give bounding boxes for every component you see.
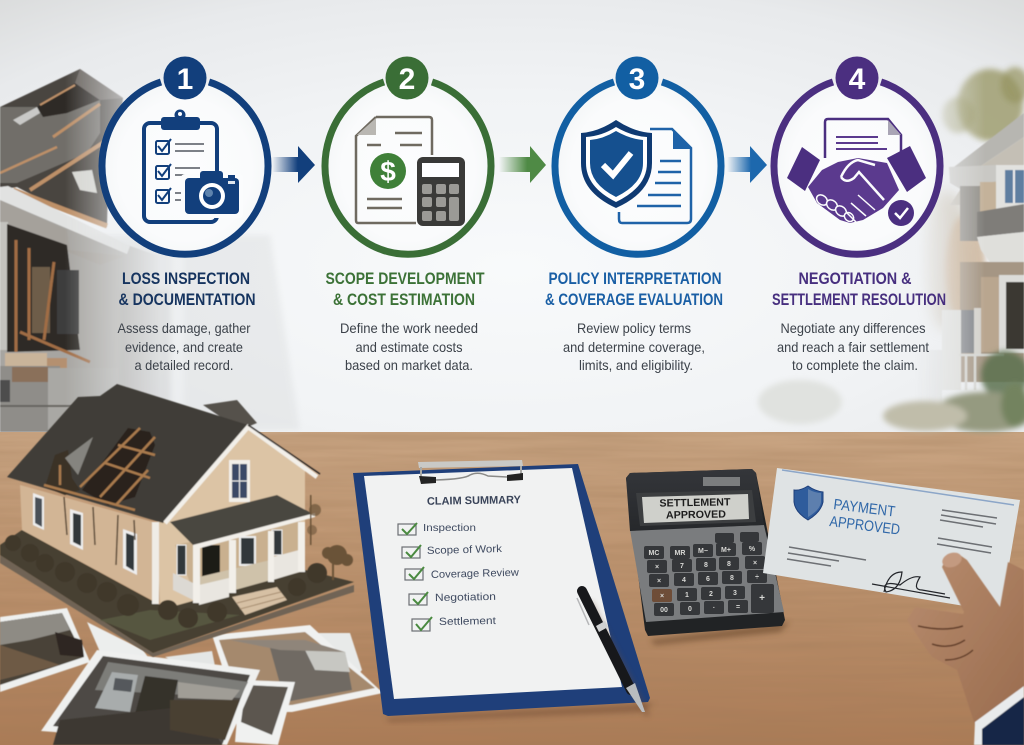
- checklist: Inspection: [423, 522, 476, 534]
- keypad: 00: [660, 607, 668, 614]
- shield: [794, 486, 823, 520]
- description 4: to complete the claim.: [792, 357, 918, 373]
- ring and badge 2: 2: [399, 63, 415, 96]
- tree foliage: [919, 67, 1024, 330]
- payment text: [829, 496, 901, 539]
- arrow 3 to 4: [727, 146, 767, 183]
- keypad: 1: [685, 592, 689, 599]
- checklist: Coverage Review: [431, 567, 519, 581]
- keypad: ×: [660, 593, 664, 600]
- photo: small interior: [235, 680, 295, 745]
- heading 3: POLICY INTERPRETATION: [548, 269, 722, 288]
- faint ghost of house behind step 1: [60, 235, 300, 430]
- arrow 2 to 3: [499, 146, 546, 183]
- keypad: ·: [713, 605, 715, 612]
- damage photographs: [0, 608, 383, 745]
- cuff and sleeve: [974, 686, 1024, 745]
- checklist: Settlement: [439, 615, 496, 628]
- garden shrubs, right: [758, 351, 1024, 432]
- ring and badge 1: 1: [177, 63, 193, 96]
- ring and badge 3: [555, 56, 721, 258]
- checklist: [398, 522, 519, 631]
- step 1: [102, 56, 268, 373]
- keypad: ÷: [755, 574, 759, 581]
- body: [626, 469, 785, 636]
- main roof: [7, 384, 248, 523]
- keypad: +: [759, 593, 765, 604]
- description 4: and reach a fair settlement: [777, 339, 929, 355]
- keypad: 3: [733, 590, 737, 597]
- checklist: Negotiation: [435, 591, 496, 604]
- keypad: 8: [727, 561, 731, 568]
- heading 1: & DOCUMENTATION: [118, 290, 256, 309]
- shrubs: [5, 535, 327, 628]
- side wall: [20, 485, 157, 603]
- board: [353, 464, 650, 716]
- description 1: a detailed record.: [134, 357, 234, 373]
- model house with damaged roof: [0, 384, 354, 657]
- icon: shield and policy document: [581, 120, 692, 223]
- ring and badge 2: [325, 56, 491, 258]
- description 3: [563, 320, 705, 373]
- paper: [763, 468, 1020, 612]
- tree and house photo, right: [925, 64, 1024, 399]
- hand holding check: [907, 550, 1024, 745]
- description 2: Define the work needed: [340, 320, 478, 336]
- step 3: [545, 56, 723, 373]
- clipboard: claim summary: [353, 460, 655, 722]
- corner trim: [152, 522, 159, 604]
- payment text: PAYMENT: [833, 496, 896, 521]
- calculator: [626, 469, 790, 645]
- description 3: Review policy terms: [577, 320, 691, 336]
- photo: interior damage right: [212, 625, 383, 712]
- keypad: [644, 532, 774, 616]
- heading 3: & COVERAGE EVALUATION: [545, 290, 723, 309]
- metal clip: [418, 460, 523, 484]
- misty sky background: [0, 0, 1024, 432]
- icon: estimate document and calculator: [356, 117, 465, 226]
- heading 4: [772, 269, 946, 309]
- display: SETTLEMENT: [659, 496, 731, 510]
- front wall: [157, 425, 305, 610]
- hand: [907, 553, 1024, 725]
- icon: estimate document and calculator: $: [380, 156, 396, 187]
- title: CLAIM SUMMARY: [427, 494, 522, 508]
- small tree: [307, 495, 353, 580]
- keypad: 6: [706, 576, 710, 583]
- icon: handshake and agreement: [787, 119, 926, 226]
- description 1: [118, 320, 251, 373]
- keypad: M−: [698, 548, 708, 555]
- display: [636, 490, 756, 526]
- gable window: [229, 460, 250, 502]
- keypad: 4: [682, 577, 686, 584]
- keypad: 8: [704, 562, 708, 569]
- keypad: =: [736, 604, 740, 611]
- roof damage: [44, 428, 155, 565]
- description 3: limits, and eligibility.: [579, 357, 693, 373]
- keypad: 2: [709, 591, 713, 598]
- keypad: 8: [730, 575, 734, 582]
- ring and badge 1: [102, 56, 268, 258]
- keypad: ×: [753, 560, 757, 567]
- ring and badge 4: [774, 56, 940, 258]
- porch: [170, 495, 315, 615]
- display: APPROVED: [666, 508, 726, 522]
- description 4: Negotiate any differences: [780, 320, 926, 336]
- keypad: 7: [680, 563, 684, 570]
- gable trim: [165, 427, 317, 523]
- pen: [577, 591, 648, 716]
- step 4: [772, 56, 946, 373]
- wooden table: [0, 432, 1024, 745]
- keypad: MR: [675, 550, 685, 557]
- ring and badge 3: 3: [629, 63, 645, 96]
- description 4: [777, 320, 929, 373]
- description 2: and estimate costs: [356, 339, 462, 355]
- checklist: Scope of Work: [427, 543, 503, 557]
- heading 1: [118, 269, 256, 309]
- keypad: MC: [649, 550, 659, 557]
- signature: [872, 572, 950, 598]
- description 1: evidence, and create: [125, 339, 243, 355]
- description 1: Assess damage, gather: [118, 320, 251, 336]
- keypad: %: [749, 546, 756, 553]
- side windows: [33, 493, 137, 575]
- description 2: based on market data.: [345, 357, 473, 373]
- heading 1: LOSS INSPECTION: [122, 269, 250, 288]
- keypad: ×: [655, 564, 659, 571]
- base: [0, 530, 354, 657]
- print lines: [787, 510, 997, 566]
- heading 2: [326, 269, 485, 309]
- photo: front damaged room: [41, 650, 260, 745]
- keypad: ×: [657, 578, 661, 585]
- solar panel: [703, 477, 740, 486]
- arrow 1 to 2: [272, 146, 315, 183]
- rear roof hip: [203, 400, 257, 430]
- board shadow: [385, 703, 655, 722]
- payment text: APPROVED: [829, 513, 901, 539]
- description 3: and determine coverage,: [563, 339, 705, 355]
- heading 2: & COST ESTIMATION: [333, 290, 475, 309]
- ring and badge 4: 4: [849, 63, 866, 96]
- description 2: [340, 320, 478, 373]
- payment approved check: [763, 468, 1020, 612]
- paper: [364, 468, 622, 699]
- heading 4: SETTLEMENT RESOLUTION: [772, 290, 946, 309]
- photo: stacked back prints: [87, 622, 362, 690]
- damaged house photo, left: [0, 68, 150, 432]
- keypad: 0: [688, 606, 692, 613]
- heading 3: [545, 269, 723, 309]
- heading 2: SCOPE DEVELOPMENT: [326, 269, 485, 288]
- icon: clipboard and camera: [144, 110, 243, 222]
- photo: left roof damage: [0, 608, 90, 692]
- keypad: M+: [721, 547, 731, 554]
- heading 4: NEGOTIATION &: [798, 269, 912, 288]
- step 2: [325, 56, 491, 373]
